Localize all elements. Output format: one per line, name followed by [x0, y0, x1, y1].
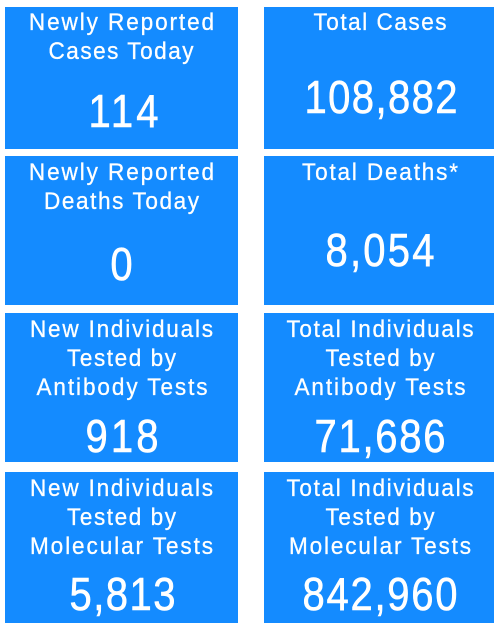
- heading: total deaths: Total Deaths*: [302, 158, 458, 185]
- panel: total individuals tested by molecular tests: [264, 472, 494, 623]
- panel: total deaths: [264, 156, 494, 305]
- panel: new individuals tested by molecular tests: [5, 472, 238, 623]
- heading: total individuals tested by molecular tests: [286, 474, 474, 559]
- heading: new individuals tested by antibody tests: Tested by: [67, 344, 176, 371]
- number: 8,054: 8,054: [325, 225, 435, 277]
- heading: newly reported deaths today: Newly Reported: [29, 158, 214, 185]
- heading: newly reported deaths today: [29, 158, 214, 214]
- heading: new individuals tested by molecular tests: Molecular Tests: [30, 532, 213, 559]
- heading: new individuals tested by antibody tests: New Individuals: [30, 315, 213, 342]
- heading: new individuals tested by molecular tests: Tested by: [67, 503, 176, 530]
- heading: newly reported cases today: [29, 8, 214, 64]
- number: 5,813: 5,813: [70, 569, 175, 621]
- heading: newly reported deaths today: Deaths Today: [44, 187, 199, 214]
- heading: total individuals tested by antibody tests: Tested by: [325, 344, 435, 371]
- heading: total individuals tested by antibody tests: [286, 315, 474, 400]
- number: 918: 918: [86, 411, 158, 463]
- panel: newly reported cases today: [5, 7, 238, 149]
- heading: total cases: Total Cases: [313, 8, 447, 35]
- number: 842,960: 842,960: [302, 569, 458, 621]
- heading: total individuals tested by antibody tests: Total Individuals: [286, 315, 474, 342]
- heading: total individuals tested by molecular tests: Molecular Tests: [289, 532, 471, 559]
- heading: newly reported cases today: Cases Today: [48, 37, 194, 64]
- heading: total individuals tested by molecular tests: Total Individuals: [286, 474, 474, 501]
- number: 108,882: 108,882: [304, 72, 458, 124]
- heading: total individuals tested by antibody tests: Antibody Tests: [294, 373, 466, 400]
- heading: new individuals tested by antibody tests: Antibody Tests: [36, 373, 208, 400]
- panel: new individuals tested by antibody tests: [5, 313, 238, 463]
- heading: new individuals tested by molecular tests: [30, 474, 213, 559]
- heading: total individuals tested by molecular tests: Tested by: [325, 503, 435, 530]
- number: 0: 0: [110, 239, 133, 291]
- panel: newly reported deaths today: [5, 156, 238, 305]
- panel: total individuals tested by antibody tests: [264, 313, 494, 463]
- panel: total cases: [264, 7, 494, 149]
- heading: new individuals tested by molecular tests: New Individuals: [30, 474, 213, 501]
- number: 114: 114: [88, 86, 159, 138]
- heading: newly reported cases today: Newly Reported: [29, 8, 214, 35]
- number: 71,686: 71,686: [314, 411, 446, 463]
- heading: new individuals tested by antibody tests: [30, 315, 213, 400]
